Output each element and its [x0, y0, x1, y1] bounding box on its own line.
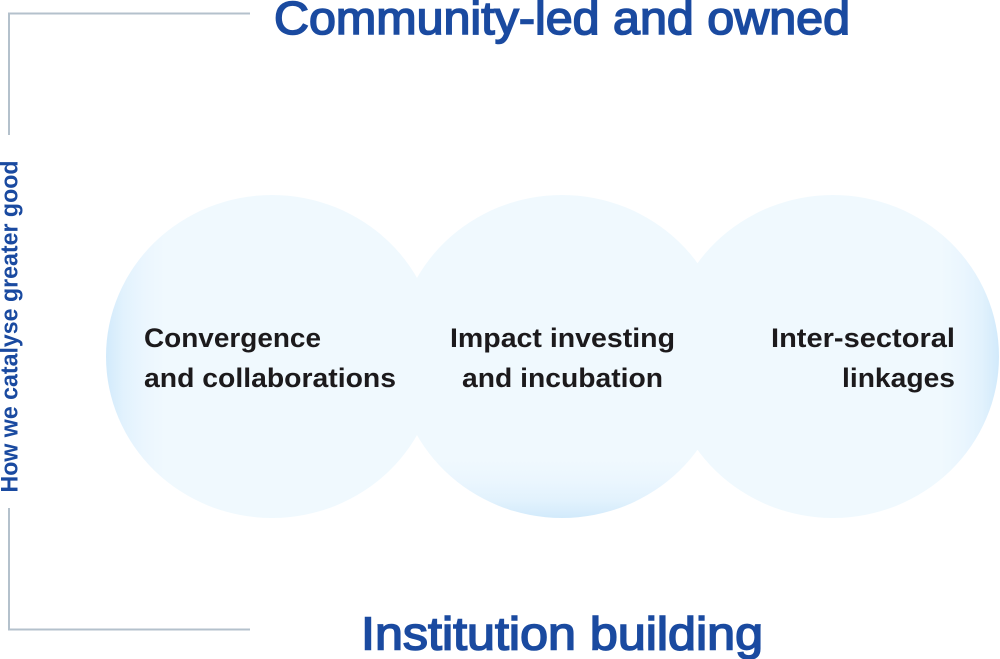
text: inter-sectoral linkages [771, 323, 955, 393]
text: impact investing and incubation [450, 323, 675, 393]
bracket: top [9, 14, 250, 135]
text: convergence and collaborations [144, 323, 396, 393]
circle: middle [396, 195, 728, 518]
text: convergence and collaborations: and collaborations [144, 363, 396, 393]
text: inter-sectoral linkages: linkages [842, 363, 955, 393]
circle: right [667, 195, 999, 518]
circle: left [106, 195, 438, 518]
text: impact investing and incubation: Impact investing [450, 323, 675, 353]
text: convergence and collaborations: Convergence [144, 323, 321, 353]
heading: institution building: Institution building [361, 608, 763, 659]
text: inter-sectoral linkages: Inter-sectoral [771, 323, 955, 353]
text: impact investing and incubation: and incubation [462, 363, 663, 393]
bracket: bottom [9, 508, 250, 630]
